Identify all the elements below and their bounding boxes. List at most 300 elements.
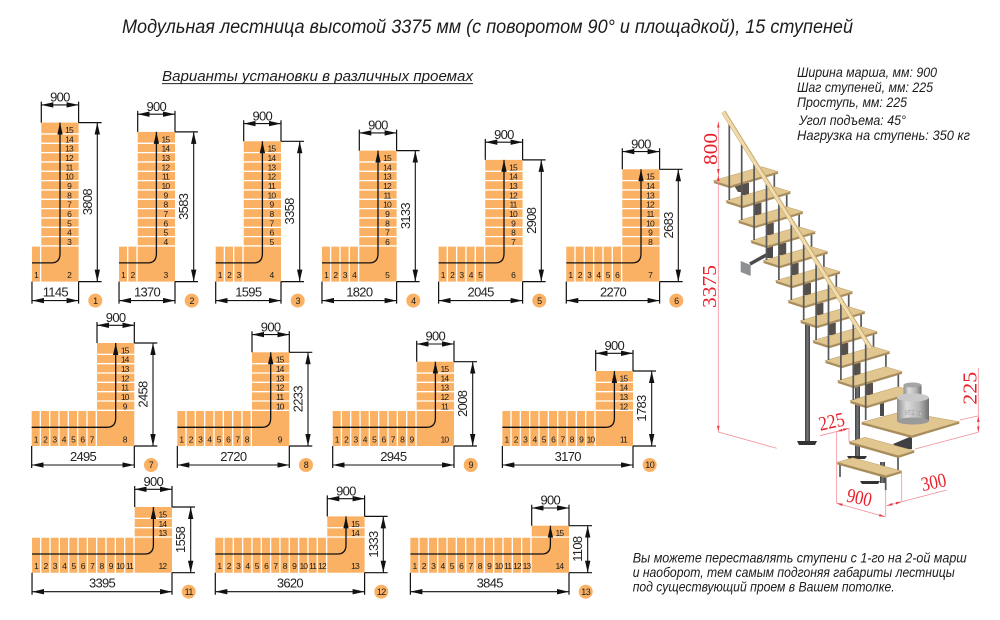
step numbers: 12 <box>513 561 522 571</box>
staircase illustration <box>713 112 959 490</box>
width dimension: 900 <box>605 338 625 353</box>
length dimension: 3845 <box>477 576 503 591</box>
diagram 3 <box>216 108 305 308</box>
step numbers: 6 <box>385 237 390 247</box>
step numbers: 9 <box>385 209 390 219</box>
steps <box>439 160 523 282</box>
width dimension: 900 <box>106 310 126 325</box>
step numbers: 1 <box>34 270 39 280</box>
height dimension: 2908 <box>524 207 539 234</box>
width dimension <box>622 136 660 169</box>
step numbers: 3 <box>53 561 58 571</box>
step numbers: 15 <box>509 162 518 172</box>
height dimension <box>79 123 102 282</box>
step numbers: 15 <box>556 528 564 538</box>
steps <box>322 151 397 282</box>
badge: 11 <box>185 587 193 597</box>
step numbers: 11 <box>441 401 449 411</box>
badge: 1 <box>93 296 98 306</box>
step numbers: 12 <box>318 561 327 571</box>
step numbers: 9 <box>278 434 283 444</box>
height dimension <box>633 371 656 446</box>
length dimension: 2045 <box>468 285 494 300</box>
step numbers: 3 <box>459 270 464 280</box>
step numbers: 10 <box>65 172 74 182</box>
dimension 300 <box>887 469 948 506</box>
length dimension: 1820 <box>346 285 373 300</box>
step numbers: 5 <box>269 237 274 247</box>
step numbers: 13 <box>159 528 167 538</box>
width dimension <box>252 319 289 352</box>
length dimension <box>215 573 365 595</box>
step numbers: 4 <box>352 270 357 280</box>
step numbers: 12 <box>441 392 449 402</box>
step numbers: 11 <box>126 561 134 571</box>
diagram 5 <box>439 127 546 308</box>
step numbers: 10 <box>299 561 308 571</box>
dimension 3375 <box>699 175 777 448</box>
badge <box>299 458 313 472</box>
step numbers: 2 <box>67 270 72 280</box>
step numbers: 10 <box>495 561 503 571</box>
width dimension: 900 <box>336 483 356 498</box>
step numbers <box>121 134 170 280</box>
specifications text: Ширина марша, мм: 900 <box>797 64 937 80</box>
step numbers: 3 <box>198 434 203 444</box>
step numbers: 1 <box>218 270 223 280</box>
step numbers: 8 <box>570 434 575 444</box>
step numbers: 2 <box>227 270 232 280</box>
step numbers: 8 <box>67 190 72 200</box>
step numbers: 9 <box>163 190 168 200</box>
step numbers: 10 <box>116 561 125 571</box>
width dimension <box>41 90 79 123</box>
step numbers: 6 <box>615 270 620 280</box>
step numbers: 15 <box>646 172 655 182</box>
step numbers: 13 <box>646 190 655 200</box>
step numbers: 7 <box>560 434 565 444</box>
step numbers: 1 <box>335 434 340 444</box>
height dimension: 3583 <box>176 193 191 220</box>
step numbers: 14 <box>441 373 449 383</box>
height dimension <box>172 507 195 573</box>
step numbers: 7 <box>235 434 240 444</box>
step numbers: 14 <box>121 355 130 365</box>
step numbers: 5 <box>217 434 222 444</box>
step numbers: 11 <box>646 209 655 219</box>
dimension 225 left: 225 <box>817 409 847 436</box>
handrail <box>723 112 871 348</box>
length dimension <box>32 573 172 595</box>
height dimension <box>660 169 683 282</box>
tread front edges <box>714 173 914 407</box>
short balusters <box>774 172 911 490</box>
badge <box>464 458 478 472</box>
width dimension: 900 <box>147 99 167 114</box>
step numbers: 15 <box>383 153 392 163</box>
step numbers: 1 <box>217 561 222 571</box>
step numbers: 11 <box>276 392 284 402</box>
step numbers: 3 <box>236 270 241 280</box>
step numbers: 12 <box>268 172 276 182</box>
length dimension <box>32 282 79 304</box>
diagram 13 <box>410 493 593 599</box>
step numbers: 15 <box>620 373 628 383</box>
length dimension: 3170 <box>555 449 581 464</box>
height dimension: 2008 <box>455 390 470 417</box>
step numbers: 9 <box>648 228 653 238</box>
height dimension: 1333 <box>366 531 381 558</box>
step numbers: 15 <box>276 355 285 365</box>
step numbers: 7 <box>67 200 72 210</box>
height dimension: 2683 <box>661 212 676 238</box>
badge <box>185 294 199 308</box>
dimension 300: 300 <box>919 469 948 496</box>
height dimension <box>365 516 388 573</box>
step numbers: 13 <box>620 392 628 402</box>
weight 350 kg: 350 кг <box>904 410 923 417</box>
step numbers: 6 <box>269 228 274 238</box>
height dimension: 2233 <box>290 386 306 412</box>
width dimension: 900 <box>368 118 388 133</box>
step numbers: 10 <box>646 218 655 228</box>
diagram 12 <box>215 483 388 599</box>
length dimension: 1145 <box>43 285 68 300</box>
step numbers: 9 <box>67 181 72 191</box>
step numbers: 13 <box>121 364 130 374</box>
step numbers <box>218 144 276 280</box>
width dimension <box>97 310 134 343</box>
width dimension <box>596 338 633 371</box>
step numbers: 3 <box>587 270 592 280</box>
diagram 4 <box>322 118 420 308</box>
step numbers: 10 <box>276 401 285 411</box>
step numbers: 3 <box>163 270 168 280</box>
step numbers: 4 <box>207 434 212 444</box>
badge: 3 <box>295 296 300 306</box>
specifications text: Угол подъема: 45° <box>798 112 906 128</box>
steps <box>215 516 365 573</box>
weight 350 kg <box>897 382 929 424</box>
specifications text: Проступь, мм: 225 <box>797 94 907 110</box>
step numbers: 1 <box>34 561 39 571</box>
step numbers: 2 <box>43 561 48 571</box>
height dimension <box>523 160 546 282</box>
walking line arrow <box>502 371 614 427</box>
badge: 6 <box>674 296 679 306</box>
step numbers: 6 <box>81 561 86 571</box>
step numbers: 14 <box>556 561 564 571</box>
step numbers <box>335 364 449 444</box>
width dimension: 900 <box>494 127 514 142</box>
step numbers: 14 <box>620 383 628 393</box>
step numbers: 7 <box>511 237 516 247</box>
step numbers: 8 <box>163 200 168 210</box>
step numbers: 1 <box>324 270 329 280</box>
step numbers: 5 <box>450 561 455 571</box>
step numbers <box>324 153 392 280</box>
badge: 10 <box>645 460 655 470</box>
diagram 10 <box>502 338 657 472</box>
specifications text: Нагрузка на ступень: 350 кг <box>797 127 970 143</box>
badge: 13 <box>581 587 591 597</box>
step numbers: 4 <box>245 561 250 571</box>
step numbers: 9 <box>579 434 584 444</box>
length dimension: 1370 <box>134 285 161 300</box>
step numbers: 14 <box>646 181 655 191</box>
walking line arrow <box>32 507 153 554</box>
length dimension <box>216 282 281 304</box>
badge: 7 <box>149 460 154 470</box>
badge <box>406 294 420 308</box>
steps <box>32 507 172 573</box>
width dimension <box>327 483 365 516</box>
step numbers: 11 <box>309 561 317 571</box>
badge: 9 <box>468 460 473 470</box>
step numbers: 12 <box>509 190 518 200</box>
height dimension: 1783 <box>634 395 649 422</box>
step numbers: 1 <box>412 561 417 571</box>
step numbers: 14 <box>383 162 392 172</box>
diagram 8 <box>177 319 313 472</box>
step numbers: 1 <box>441 270 446 280</box>
length dimension <box>32 446 134 468</box>
step numbers: 9 <box>109 561 114 571</box>
length dimension <box>322 282 397 304</box>
step numbers: 6 <box>264 561 269 571</box>
walking line arrow <box>32 343 116 427</box>
steps <box>566 169 660 282</box>
step numbers: 4 <box>62 561 67 571</box>
width dimension: 900 <box>253 108 273 123</box>
steps <box>32 123 79 282</box>
badge <box>643 458 657 472</box>
step numbers: 3 <box>52 434 57 444</box>
step numbers: 9 <box>292 561 297 571</box>
length dimension: 2720 <box>220 449 247 464</box>
step numbers: 9 <box>409 434 414 444</box>
step numbers: 9 <box>269 200 274 210</box>
step numbers <box>34 345 130 444</box>
step numbers: 10 <box>441 434 449 444</box>
dimension 3375: 3375 <box>699 265 721 308</box>
step numbers: 10 <box>162 181 170 191</box>
badge <box>579 585 593 599</box>
step numbers: 8 <box>269 209 274 219</box>
note text: и наоборот, тем самым подгоняя габариты лестницы <box>633 564 955 580</box>
width dimension <box>244 108 281 141</box>
title: Модульная лестница высотой 3375 мм (с поворотом 90° и площадкой), 15 ступеней <box>122 17 853 38</box>
steps <box>216 141 281 282</box>
step numbers <box>504 373 628 444</box>
step numbers: 14 <box>351 528 360 538</box>
badge <box>532 294 546 308</box>
step numbers: 8 <box>123 434 128 444</box>
width dimension: 900 <box>144 474 164 489</box>
step numbers: 11 <box>268 181 276 191</box>
step numbers: 7 <box>391 434 396 444</box>
step numbers: 2 <box>514 434 519 444</box>
step numbers: 11 <box>162 172 170 182</box>
step numbers: 12 <box>383 181 392 191</box>
height dimension: 2458 <box>136 381 150 408</box>
width dimension <box>359 118 397 151</box>
badge <box>669 294 683 308</box>
step numbers: 13 <box>383 172 392 182</box>
diagram 7 <box>32 310 158 472</box>
height dimension: 3133 <box>398 203 413 229</box>
step numbers: 7 <box>163 209 168 219</box>
step numbers: 4 <box>440 561 445 571</box>
step numbers: 12 <box>121 373 130 383</box>
width dimension: 900 <box>426 329 446 344</box>
step numbers: 3 <box>353 434 358 444</box>
step numbers: 2 <box>450 270 455 280</box>
step numbers: 13 <box>65 144 74 154</box>
dimension 900: 900 <box>845 485 874 511</box>
step numbers: 15 <box>441 364 449 374</box>
diagram 11 <box>32 474 196 599</box>
step numbers: 2 <box>189 434 194 444</box>
step numbers: 4 <box>269 270 274 280</box>
step numbers: 10 <box>121 392 130 402</box>
walking line arrow <box>410 526 550 554</box>
step numbers: 4 <box>469 270 474 280</box>
step numbers: 15 <box>162 134 170 144</box>
step numbers: 5 <box>71 561 76 571</box>
step numbers: 1 <box>504 434 509 444</box>
walking line arrow <box>439 160 504 263</box>
step numbers: 8 <box>245 434 250 444</box>
length dimension <box>410 573 569 595</box>
height dimension <box>454 362 477 446</box>
step numbers: 3 <box>67 237 72 247</box>
dimension 800: 800 <box>700 133 722 165</box>
width dimension <box>485 127 523 160</box>
step numbers: 2 <box>344 434 349 444</box>
step numbers: 1 <box>121 270 126 280</box>
step numbers: 10 <box>587 434 595 444</box>
step numbers: 12 <box>646 200 655 210</box>
step numbers: 5 <box>385 270 390 280</box>
step numbers: 6 <box>67 209 72 219</box>
step numbers <box>34 509 167 571</box>
step numbers: 5 <box>71 434 76 444</box>
walking line arrow <box>119 132 156 263</box>
steps <box>177 352 289 446</box>
step numbers: 5 <box>372 434 377 444</box>
step numbers: 7 <box>648 270 653 280</box>
walking line arrow <box>216 141 262 263</box>
step numbers: 8 <box>99 561 104 571</box>
step numbers: 5 <box>163 228 168 238</box>
step numbers: 13 <box>351 561 360 571</box>
step numbers: 2 <box>227 561 232 571</box>
step numbers: 8 <box>400 434 405 444</box>
badge <box>88 294 102 308</box>
steps <box>333 362 454 446</box>
tall balusters <box>729 122 866 420</box>
step numbers: 3 <box>431 561 436 571</box>
specifications text: Шаг ступеней, мм: 225 <box>797 79 933 95</box>
badge <box>144 458 158 472</box>
step numbers: 14 <box>509 172 518 182</box>
step numbers: 14 <box>162 144 170 154</box>
step numbers: 15 <box>268 144 276 154</box>
length dimension: 3395 <box>89 576 116 591</box>
step numbers: 12 <box>276 383 285 393</box>
step numbers: 8 <box>511 228 516 238</box>
length dimension <box>333 446 454 468</box>
step numbers: 11 <box>383 190 392 200</box>
step numbers: 12 <box>159 561 167 571</box>
length dimension <box>566 282 660 304</box>
length dimension: 1595 <box>235 285 262 300</box>
dimension 225 left <box>817 409 849 503</box>
step numbers: 9 <box>511 218 516 228</box>
badge: 5 <box>537 296 542 306</box>
length dimension: 3620 <box>277 576 303 591</box>
step numbers: 6 <box>381 434 386 444</box>
subheading: Варианты установки в различных проемах <box>162 68 473 85</box>
step numbers <box>568 172 655 280</box>
step numbers: 14 <box>268 153 276 163</box>
walking line arrow <box>32 123 60 263</box>
length dimension: 2945 <box>380 449 407 464</box>
step numbers: 8 <box>385 218 390 228</box>
height dimension: 1108 <box>570 536 585 562</box>
step numbers: 15 <box>121 345 130 355</box>
height dimension: 1558 <box>173 526 188 553</box>
step numbers: 4 <box>363 434 368 444</box>
badge: 8 <box>304 460 309 470</box>
step numbers: 11 <box>504 561 512 571</box>
step numbers: 7 <box>90 561 95 571</box>
step numbers: 7 <box>273 561 278 571</box>
step numbers: 8 <box>478 561 483 571</box>
diagram 2 <box>119 99 199 308</box>
step numbers: 11 <box>620 434 628 444</box>
step numbers: 5 <box>478 270 483 280</box>
step numbers: 2 <box>333 270 338 280</box>
note text: под существующий проем в Вашем потолке. <box>633 579 895 595</box>
step numbers: 6 <box>163 218 168 228</box>
lower treads <box>837 437 914 478</box>
step numbers: 8 <box>283 561 288 571</box>
step numbers: 12 <box>620 401 628 411</box>
steps <box>502 371 633 446</box>
width dimension <box>532 493 569 526</box>
length dimension <box>177 446 289 468</box>
length dimension <box>502 446 633 468</box>
step numbers: 13 <box>276 373 285 383</box>
width dimension: 900 <box>261 319 281 334</box>
step numbers: 12 <box>162 162 170 172</box>
step numbers: 6 <box>511 270 516 280</box>
step numbers: 13 <box>509 181 518 191</box>
specifications text <box>797 64 970 143</box>
step numbers: 13 <box>523 561 531 571</box>
step numbers: 4 <box>163 237 168 247</box>
step numbers: 3 <box>523 434 528 444</box>
step numbers <box>34 125 74 280</box>
step numbers: 9 <box>487 561 492 571</box>
width dimension <box>417 329 454 362</box>
treads <box>713 167 915 406</box>
step numbers: 9 <box>123 401 128 411</box>
step numbers: 4 <box>67 228 72 238</box>
badge <box>291 294 305 308</box>
